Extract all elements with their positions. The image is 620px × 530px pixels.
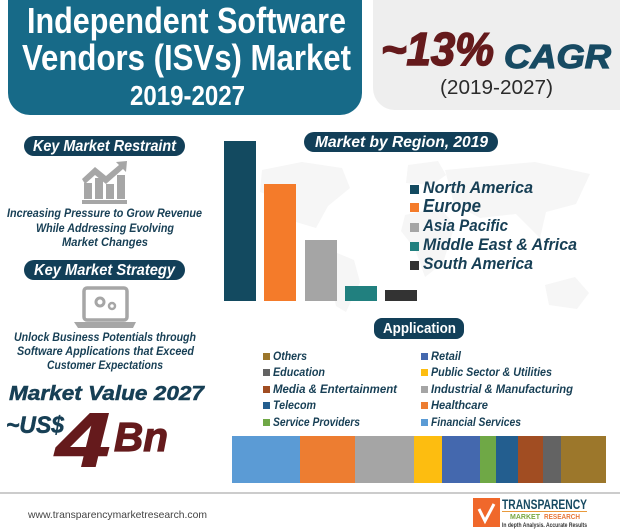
text: logo name: TRANSPARENCY <box>502 497 587 512</box>
legend: applications left column: Service Providers <box>273 415 360 429</box>
panel: CAGR <box>373 0 620 110</box>
text: approx US dollars: ~US$ <box>6 412 65 439</box>
panel: key market strategy <box>14 260 196 372</box>
legend: applications right column <box>421 349 574 429</box>
text: strategy description: Unlock Business Potentials through <box>14 332 196 344</box>
stacked bar: application share <box>232 436 606 483</box>
heading: title line 1: Independent Software <box>27 0 346 41</box>
text: restraint description: Market Changes <box>62 237 148 249</box>
text: strategy description: Customer Expectations <box>47 360 163 372</box>
legend: applications right column: Public Sector & Utilities <box>431 365 552 379</box>
heading: application <box>374 318 464 339</box>
panel: market value <box>6 383 205 483</box>
icon: growth chart <box>82 161 127 204</box>
text: 13 percent: ~13% <box>381 23 494 75</box>
legend: regions: South America <box>423 255 533 273</box>
heading: key market restraint: Key Market Restraint <box>33 138 177 155</box>
heading: key market strategy: Key Market Strategy <box>34 262 176 279</box>
text: restraint description: While Addressing Evolving <box>36 223 174 235</box>
heading: title line 2: Vendors (ISVs) Market <box>22 37 351 78</box>
legend: applications right column: Retail <box>431 349 462 363</box>
text: strategy description <box>14 332 196 372</box>
text: CAGR years: (2019-2027) <box>440 77 553 99</box>
legend: applications left column: Telecom <box>273 398 316 412</box>
heading: market value 2027: Market Value 2027 <box>9 383 205 405</box>
legend: regions: Middle East & Africa <box>423 236 577 254</box>
legend: applications left column <box>263 349 398 429</box>
legend: regions: Asia Pacific <box>422 217 508 235</box>
legend: regions: Europe <box>423 196 481 216</box>
heading: application: Application <box>383 321 456 337</box>
legend: applications left column: Media & Entertainment <box>273 382 398 396</box>
text: logo market research: RESEARCH <box>544 512 580 521</box>
text: strategy description: Software Applications that Exceed <box>17 346 195 358</box>
icon: logo mark <box>473 498 500 527</box>
text: restraint description <box>7 208 203 249</box>
text: logo market research: MARKET <box>510 512 540 521</box>
legend: regions <box>410 179 577 273</box>
heading: market by region: Market by Region, 2019 <box>315 134 488 151</box>
text: logo market research <box>510 512 580 521</box>
text: logo tagline: In depth Analysis. Accurate Results <box>502 522 587 529</box>
bar chart: regions <box>224 141 417 301</box>
text: Bn: Bn <box>114 414 168 460</box>
panel: application <box>232 318 606 483</box>
logo: Transparency Market Research <box>473 497 587 529</box>
text: value 4: 4 <box>53 398 110 483</box>
legend: applications left column: Others <box>273 349 307 363</box>
legend: applications left column: Education <box>273 365 325 379</box>
legend: applications right column: Industrial & Manufacturing <box>431 382 574 396</box>
icon: laptop with gears <box>74 288 136 328</box>
panel: title <box>8 0 362 115</box>
world map backdrop <box>260 161 590 312</box>
footer: website url: www.transparencymarketresearch.com <box>27 509 207 521</box>
legend: regions: North America <box>423 179 533 197</box>
text: CAGR: CAGR <box>504 38 611 75</box>
heading: title years: 2019-2027 <box>130 80 245 111</box>
text: restraint description: Increasing Pressure to Grow Revenue <box>7 208 203 220</box>
legend: applications right column: Healthcare <box>431 398 488 412</box>
legend: applications right column: Financial Services <box>431 415 521 429</box>
panel: key market restraint <box>7 136 203 249</box>
panel: market by region <box>224 132 590 312</box>
